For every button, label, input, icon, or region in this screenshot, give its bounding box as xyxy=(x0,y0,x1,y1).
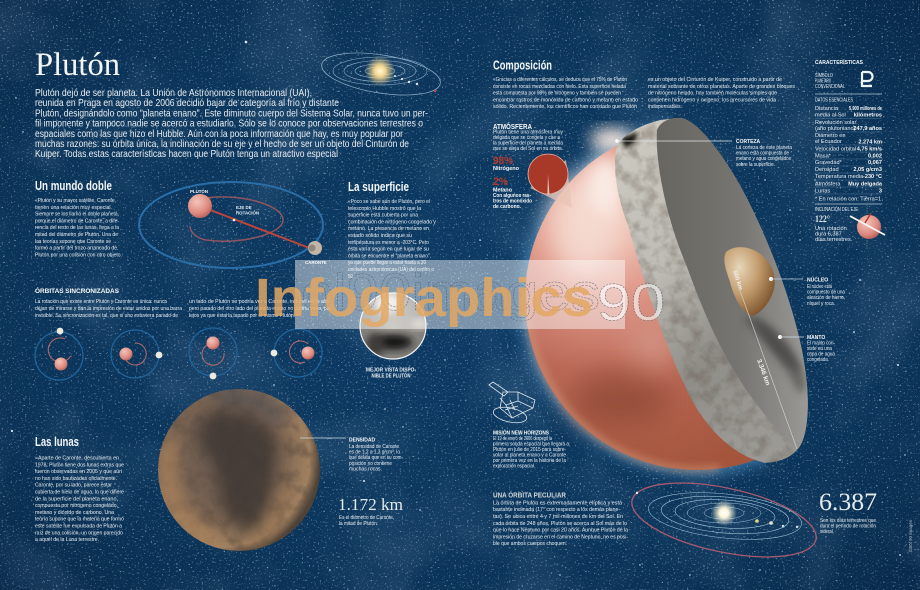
stat: 122°: 122° xyxy=(815,214,830,224)
stat: 2% metano xyxy=(493,176,532,210)
table: datos esenciales: 3 xyxy=(879,188,882,194)
text: las lunas: raíz de una colisión, un origen parecido xyxy=(35,530,123,536)
callout: manto: congelada. xyxy=(807,357,829,363)
icon: símbolo de plutón xyxy=(862,72,872,87)
text: las lunas: metano y dióxido de carbono. Una xyxy=(35,510,115,516)
text: una órbita peculiar: bastante inclinada (17° con respecto a los demás plane- xyxy=(493,507,620,513)
callout: densidad: es de 1,2 a 1,3 g/cm³, lo xyxy=(349,450,400,456)
icon: solar system top xyxy=(319,46,443,102)
callout: densidad: muchas rocas. xyxy=(349,466,382,472)
table: datos esenciales: Gravedad* xyxy=(815,160,843,166)
text: las lunas: fueron observadas en 2005 y que aún xyxy=(35,469,122,475)
text: la superficie: órbita se encuentre el "planeta enano", xyxy=(348,253,431,259)
text: órbitas sincronizadas: lejos ya que estaría tapado por el mismo Plutón. xyxy=(189,313,295,319)
text: las lunas: cubierta de hielo de agua, lo que difiere xyxy=(35,490,124,496)
text: composición xyxy=(493,77,795,110)
text: composición: «Gracias a diferentes cálculos, se deduce que el 75% de Plutón xyxy=(493,77,627,83)
text: misión new horizons: por primera vez en la historia de la xyxy=(493,458,567,464)
table: datos esenciales: kilómetros xyxy=(854,112,882,118)
label: plutón: PLUTÓN xyxy=(190,189,208,194)
table: datos esenciales: media al Sol xyxy=(815,112,846,118)
table: datos esenciales: 5.900 millones de xyxy=(849,106,882,112)
callout: núcleo xyxy=(769,276,846,307)
text: atmósfera: delgada que se congela y cae a xyxy=(493,135,561,141)
callout: corteza xyxy=(615,139,793,168)
label: 3.346 km: 3.346 km xyxy=(755,358,771,387)
text: un mundo doble: las teorías supone que Caronte se xyxy=(35,239,111,245)
table: datos esenciales: 247,9 años xyxy=(853,126,882,132)
text: atmósfera xyxy=(493,130,564,152)
intro text block: espaciales como las que hizo el Hubble. Aún con la poca información que hay, es muy popular por xyxy=(35,129,404,140)
panel: las lunas xyxy=(35,435,124,543)
text: composición: sólido. Recientemente, los científicos han constado que Plutón xyxy=(493,104,637,110)
diagram: fase 2 xyxy=(111,330,162,378)
stat: 2% metano: 2% xyxy=(493,176,508,188)
text: las lunas xyxy=(35,456,124,543)
callout: corteza: sobre la superficie. xyxy=(736,162,775,168)
image: mejor vista de plutón xyxy=(360,293,429,380)
table: datos esenciales: (año plutoniano) xyxy=(815,126,856,132)
caption: mejor vista: MEJOR VISTA DISPO- xyxy=(366,368,416,374)
text: órbitas sincronizadas: pero parado del otro lado del planeta enano no podría verlo, por xyxy=(189,306,331,312)
stat: 6.387: Son los días terrestres que xyxy=(820,518,876,524)
text: órbitas sincronizadas: un lado de Plutón se podría ver a Caronte, inmóvil en lo alto, xyxy=(189,299,331,305)
label: símbolo planetario: PLANETARIO xyxy=(815,78,831,84)
text: una órbita peculiar: impresión de cruzarse en el camino de Neptuno, no es posi- xyxy=(493,534,628,540)
text: las lunas: no han sido bautizadas oficialmente. xyxy=(35,476,117,482)
text: una órbita peculiar: ble que ambos cuerpos choquen. xyxy=(493,541,567,547)
text: las lunas: «Aparte de Caronte, descubierta en xyxy=(35,456,119,462)
table: datos esenciales: Velocidad orbital xyxy=(815,146,856,152)
table: datos esenciales: -230 °C xyxy=(863,174,882,180)
heading: composición: Composición xyxy=(493,58,552,72)
callout: manto: MANTO xyxy=(807,335,825,341)
text: composición: encontrar rastros de monóxido de carbono y metano en estado xyxy=(493,97,638,103)
stat: 2% metano: tros de monóxido xyxy=(493,198,532,204)
label: eje de rotación: EJE DE xyxy=(236,205,252,210)
callout: núcleo: NÚCLEO xyxy=(807,276,828,284)
table: datos esenciales: 0,002 xyxy=(868,154,882,160)
heading: un mundo doble: Un mundo doble xyxy=(35,179,112,193)
heading: misión new horizons: MISIÓN NEW HORIZONS xyxy=(493,428,549,436)
text: las lunas: Caronte, por su lado, parece estar xyxy=(35,483,112,489)
label: símbolo planetario: SÍMBOLO xyxy=(815,72,833,79)
panel: un mundo doble xyxy=(35,179,122,258)
text: un mundo doble: porque el diámetro de Caronte, a dife- xyxy=(35,218,119,224)
text: misión new horizons: Plutón en julio de 2015 para sobre- xyxy=(493,447,566,453)
diagram: fase 1 xyxy=(35,328,83,380)
watermark: Infographics xyxy=(255,268,593,328)
table: datos esenciales: Revolución solar xyxy=(815,120,856,126)
text: atmósfera: la superficie del planeta a medida xyxy=(493,140,564,146)
text: un mundo doble: formó a partir del trozo arrancado de xyxy=(35,246,117,252)
text: órbitas sincronizadas xyxy=(35,299,331,319)
credit: ©Sol 90 Images xyxy=(908,519,913,552)
stat: 1.172 km: 1.172 km xyxy=(338,495,403,514)
table: datos esenciales: Masa* xyxy=(815,154,832,160)
table: datos esenciales: Temperatura media xyxy=(815,174,864,180)
text: un mundo doble: mitad del diámetro de Plutón. Una de xyxy=(35,232,118,238)
heading: atmósfera: ATMÓSFERA xyxy=(493,122,532,131)
text: una órbita peculiar: que lo hace Neptuno por casi 20 años. Aunque Plutón dé la xyxy=(493,528,629,534)
text: composición: de nitrógeno helado, hay también moléculas simples que xyxy=(648,91,777,97)
stat: 122°: dura 6,387 xyxy=(815,232,842,238)
stat: 122° xyxy=(815,214,853,243)
illustration: corte de plutón xyxy=(515,114,808,482)
callout: manto: capa de agua xyxy=(807,352,836,358)
text: una órbita peculiar: La órbita de Plutón es extremadamente elíptica y está xyxy=(493,500,623,506)
watermark: 90 xyxy=(597,274,665,332)
stat: 98% nitrógeno xyxy=(493,155,520,172)
planet atmosphere glow xyxy=(515,114,767,482)
label: inclinación del eje: INCLINACIÓN DEL EJE xyxy=(815,206,858,213)
heading: órbitas sincronizadas: ÓRBITAS SINCRONIZADAS xyxy=(35,286,120,295)
text: atmósfera: que se aleja del Sol en su órbita. xyxy=(493,146,563,152)
callout: núcleo: aleación de hierro, xyxy=(807,295,845,301)
callout: densidad: DENSIDAD xyxy=(349,438,376,444)
mantle dark band xyxy=(752,318,800,372)
text: una órbita peculiar xyxy=(493,500,629,547)
text: misión new horizons: El 19 de enero de 2006 despegó la xyxy=(493,436,553,442)
text: las lunas: este satélite fue expulsada de Plutón a xyxy=(35,524,123,530)
callout: corteza: enano está compuesta de xyxy=(736,151,789,157)
text: la superficie: metano. La presencia de metano en xyxy=(348,226,429,232)
core xyxy=(724,247,775,316)
text: la superficie: superficie está cubierta por una xyxy=(348,213,419,219)
table: datos esenciales: 2.274 km xyxy=(858,140,882,146)
panel: composición xyxy=(493,58,795,110)
illustration: caronte xyxy=(158,389,320,551)
heading: características: CARACTERÍSTICAS xyxy=(815,58,863,66)
diagram: plutón y caronte xyxy=(139,182,327,268)
text: la superficie: estado sólido indica que su xyxy=(348,233,412,239)
table: datos esenciales: Lunas xyxy=(815,188,830,194)
table: datos esenciales: Diámetro en xyxy=(815,133,845,139)
callout: densidad: posición no contiene xyxy=(349,461,392,467)
diagram: fase 4 xyxy=(271,329,322,377)
text: las lunas: compuesta por nitrógeno congelado, xyxy=(35,503,118,509)
text: una órbita peculiar: cada órbita de 248 años, Plutón se acerca al Sol más de lo xyxy=(493,521,627,527)
text: órbitas sincronizadas: invisible. Su sincronización es tal, que si uno estuviera parado de xyxy=(35,313,178,319)
label: 500 km: 500 km xyxy=(731,270,743,291)
label: símbolo planetario: CONVENCIONAL xyxy=(815,84,845,90)
chart: composición atmosférica xyxy=(528,154,572,208)
panel: atmósfera xyxy=(493,122,572,210)
intro text block: fil imponente y tampoco nadie se acercó a estudiarlo. Sólo se lo conoce por observaciones terrestres o xyxy=(35,119,423,130)
label: símbolo planetario xyxy=(815,72,845,90)
text: misión new horizons xyxy=(493,436,570,470)
stat: 2% metano: de carbono. xyxy=(493,204,522,210)
text: un mundo doble: Siempre se los llamó el doble planeta, xyxy=(35,212,119,218)
label: eje de rotación xyxy=(236,205,259,216)
callout: manto: El manto con- xyxy=(807,340,835,346)
text: un mundo doble xyxy=(35,198,122,258)
text: la superficie: «Poco se sabe aún de Plutón, pero el xyxy=(348,199,430,205)
text: órbitas sincronizadas: La rotación que existe entre Plutón y Caronte es única: nunca xyxy=(35,299,168,305)
text: composición: es un objeto del Cinturón de Kuiper, construido a partir de xyxy=(648,77,782,83)
stat: 2% metano: Con algunos ras- xyxy=(493,193,531,199)
callout: núcleo: El núcleo está xyxy=(807,284,833,290)
callout: núcleo: níquel y roca. xyxy=(807,301,835,307)
text: una órbita peculiar: tas). Se ubica entre 4 y 7 mil millones de km del Sol. En xyxy=(493,514,623,520)
text: composición: consiste en rocas mezcladas con hielo. Esta superficie helada xyxy=(493,84,627,90)
panel: misión new horizons xyxy=(493,428,570,470)
stat: 6.387: sideral. xyxy=(820,529,834,535)
table: datos esenciales xyxy=(815,98,883,202)
panel: la superficie xyxy=(348,180,436,280)
text: un mundo doble: tienen una relación muy especial. xyxy=(35,205,112,211)
icon: inclinación del eje xyxy=(850,205,885,250)
stat: 98% nitrógeno: Nitrógeno xyxy=(493,166,520,172)
text: las lunas: teoría supone que la materia que formó xyxy=(35,517,124,523)
mantle face xyxy=(657,118,808,450)
intro text block: reunida en Praga en agosto de 2006 decidió bajar de categoría al frío y distante xyxy=(35,98,339,109)
table: datos esenciales: DATOS ESENCIALES xyxy=(815,98,853,104)
table: datos esenciales: 0,067 xyxy=(868,160,882,166)
text: misión new horizons: volar al planeta enano y a Caronte xyxy=(493,452,566,458)
callout: densidad: La densidad de Caronte xyxy=(349,444,399,450)
intro text block: Plutón dejó de ser planeta. La Unión de Astrónomos Internacional (UAI), xyxy=(35,88,312,99)
text: atmósfera: Plutón tiene una atmósfera muy xyxy=(493,130,563,136)
text: un mundo doble: «Plutón y su mayor satélite, Caronte, xyxy=(35,198,116,204)
text: las lunas: de la superficie del planeta enano, xyxy=(35,496,118,502)
stat: 122°: días terrestres. xyxy=(815,237,853,243)
intro text block: Plutón, designándolo como "planeta enano". Este diminuto cuerpo del Sistema Solar, nunca tuvo un per- xyxy=(35,108,428,119)
watermark xyxy=(255,260,665,332)
text: un mundo doble: Plutón por una colisión con otro objeto. xyxy=(35,252,122,258)
planet sphere xyxy=(521,145,755,478)
callout: densidad: que delata que en su com- xyxy=(349,455,403,461)
label: caronte: CARONTE xyxy=(305,260,327,265)
text: composición: material sobrante de otros planetas. Aparte de grandes bloques xyxy=(648,84,795,90)
table: datos esenciales: Atmósfera xyxy=(815,182,841,188)
text: un mundo doble: rencia del resto de las lunas, llega a la xyxy=(35,225,120,231)
text: las lunas: a aquél de la Luna terrestre. xyxy=(35,537,99,543)
stat: 1.172 km xyxy=(338,495,403,527)
callout: densidad xyxy=(300,438,403,472)
text: la superficie: 50. xyxy=(348,274,354,280)
icon: sonda new horizons xyxy=(489,382,535,425)
diagram: fase 3 xyxy=(189,328,237,379)
panel: órbitas sincronizadas xyxy=(35,286,331,380)
text: composición: contienen hidrógeno y oxígeno: los precursores de vida xyxy=(648,97,777,103)
callout: corteza: CORTEZA xyxy=(736,139,761,145)
stat: 98% nitrógeno: 98% xyxy=(493,155,513,167)
table: datos esenciales: 4,75 km/s xyxy=(857,146,882,152)
text: la superficie: ya que puede llegar a estar hasta a 30 xyxy=(348,260,426,266)
intro text block: muchas razones: su órbita única, la inclinación de su eje y el hecho de ser un objeto del Cinturón de xyxy=(35,139,409,150)
heading: la superficie: La superficie xyxy=(348,180,409,194)
text: la superficie: telescopio Hubble mostró que la xyxy=(348,206,422,212)
text: composición: indispensables. xyxy=(648,104,682,110)
diagram: órbita de plutón xyxy=(625,469,823,571)
panel: una órbita peculiar xyxy=(493,490,629,547)
table: datos esenciales: Distancia xyxy=(815,106,839,112)
heading: una órbita peculiar: UNA ÓRBITA PECULIAR xyxy=(493,490,566,500)
text: misión new horizons: primera sonda espacial que llegará a xyxy=(493,442,570,448)
table: datos esenciales: Muy delgada xyxy=(848,182,883,188)
heading: las lunas: Las lunas xyxy=(35,435,79,449)
callout: corteza: La corteza de este planeta xyxy=(736,145,793,151)
caption: mejor vista xyxy=(366,368,416,380)
title: Plutón xyxy=(35,47,120,83)
panel: características xyxy=(815,58,885,250)
stat: 6.387: 6.387 xyxy=(819,487,877,516)
callout: manto xyxy=(778,335,836,363)
text: la superficie: combinación de nitrógeno congelado y xyxy=(348,219,436,225)
callout: núcleo: compuesto de una xyxy=(807,290,846,296)
stat: 122°: Una rotación xyxy=(815,226,847,232)
stat: 6.387: dura el período de rotación xyxy=(820,524,876,530)
caption: mejor vista: NIBLE DE PLUTÓN xyxy=(372,372,411,380)
text: la superficie xyxy=(348,199,436,280)
text: la superficie: ésta varía según en qué lugar de su xyxy=(348,247,429,253)
label: eje de rotación: ROTACIÓN xyxy=(236,210,259,216)
watermark: Sol90images xyxy=(262,264,600,322)
table: datos esenciales: * En relación con: Tierra=1 xyxy=(815,196,881,202)
stat: 1.172 km: Es el diámetro de Caronte, xyxy=(339,515,394,521)
stat: 2% metano: Metano xyxy=(493,188,513,194)
table: datos esenciales: Densidad xyxy=(815,167,839,173)
intro text block: Kuiper. Todas estas características hacen que Plutón tenga un atractivo especial xyxy=(35,149,338,160)
table: datos esenciales: el Ecuador xyxy=(815,139,842,145)
table: datos esenciales: 2,05 g/cm3 xyxy=(853,167,882,173)
text: misión new horizons: exploración espacial. xyxy=(493,464,535,470)
text: composición: está compuesta por 98% de nitrógeno y también se pueden xyxy=(493,91,621,97)
text: las lunas: 1978, Plutón tiene dos lunas extras que xyxy=(35,462,124,468)
text: órbitas sincronizadas: dejan de mirarse y dan la impresión de estar unidos por una barra xyxy=(35,306,183,312)
text: la superficie: temperatura es menor a -203°C. Pero xyxy=(348,240,429,246)
callout: manto: siste en una xyxy=(807,346,833,352)
callout: corteza: metano y agua congelados xyxy=(736,156,791,162)
text: la superficie: unidades astronómicas (UA) del centro o xyxy=(348,267,434,273)
stat: 1.172 km: la mitad de Plutón. xyxy=(339,521,378,527)
stat: 6.387 xyxy=(819,487,877,535)
intro text block xyxy=(35,88,428,160)
crust cut xyxy=(615,118,808,463)
